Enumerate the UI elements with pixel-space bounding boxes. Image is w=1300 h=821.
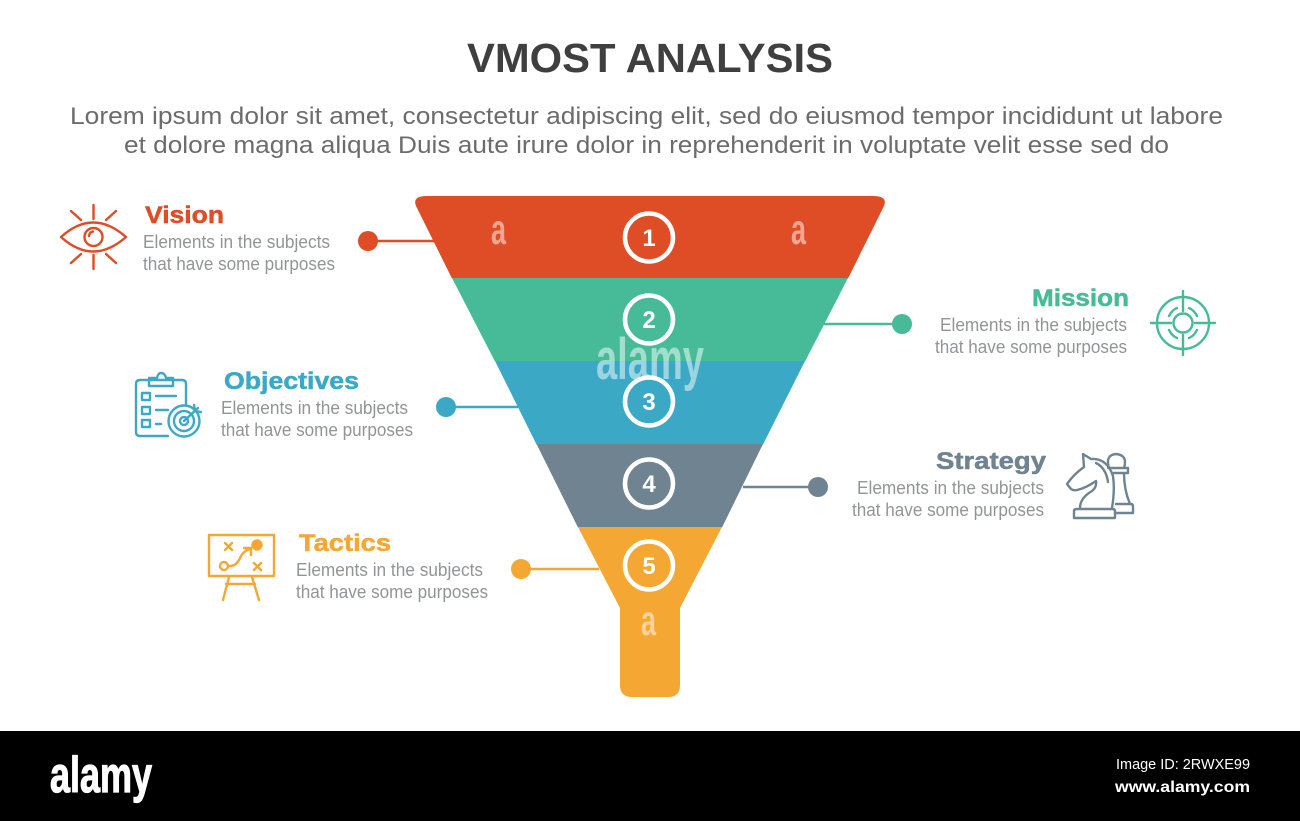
- heading: tactics: Tactics: [299, 530, 391, 557]
- icon: clipboard and dart target: [136, 373, 201, 436]
- funnel segment 1: red: [415, 196, 885, 278]
- description: vision: Elements in the subjects: [143, 232, 330, 252]
- funnel segment 5: orange with spout: [578, 527, 722, 697]
- number badge 2: 2: [642, 307, 656, 334]
- subtitle text: Lorem ipsum dolor sit amet, consectetur adipiscing elit, sed do eiusmod tempor incididunt ut labore: [70, 103, 1223, 130]
- description: tactics: [296, 560, 488, 602]
- panel: vision: [61, 202, 335, 274]
- subtitle text: et dolore magna aliqua Duis aute irure dolor in reprehenderit in voluptate velit esse sed do: [124, 132, 1169, 159]
- funnel segment 2: green: [452, 278, 848, 362]
- description: mission: Elements in the subjects: [940, 315, 1127, 335]
- connector: mission: [824, 314, 912, 334]
- watermark marks on funnel: a: [491, 206, 507, 254]
- title: VMOST ANALYSIS: [467, 35, 833, 81]
- number badge 3: 3: [642, 389, 656, 416]
- connector: strategy: [743, 477, 828, 497]
- number badge 3: [625, 378, 673, 426]
- footer bar: [0, 731, 1300, 821]
- number badge 5: 5: [642, 553, 656, 580]
- description: strategy: that have some purposes: [852, 500, 1044, 520]
- description: mission: that have some purposes: [935, 337, 1127, 357]
- description: mission: [935, 315, 1127, 357]
- icon: tactics board on easel: [209, 535, 274, 600]
- funnel segment 4: grey: [536, 444, 763, 528]
- panel: tactics: [209, 530, 488, 602]
- description: vision: that have some purposes: [143, 254, 335, 274]
- number badge 1: [625, 214, 673, 262]
- watermark marks on funnel: [491, 206, 807, 645]
- panel: strategy: [852, 448, 1133, 520]
- heading: objectives: Objectives: [224, 368, 359, 395]
- description: objectives: that have some purposes: [221, 420, 413, 440]
- description: strategy: [852, 478, 1044, 520]
- number badge 4: [625, 460, 673, 508]
- funnel segment 3: blue: [495, 361, 805, 444]
- funnel chart: [415, 196, 885, 697]
- number badge 4: 4: [642, 471, 656, 498]
- description: objectives: Elements in the subjects: [221, 398, 408, 418]
- description: objectives: [221, 398, 413, 440]
- heading: vision: Vision: [145, 202, 224, 229]
- connector: objectives: [436, 397, 518, 417]
- description: vision: [143, 232, 335, 274]
- footer logo: alamy: [50, 747, 152, 803]
- connector: vision: [358, 231, 434, 251]
- number badge 5: [625, 542, 673, 590]
- watermark marks on funnel: a: [791, 206, 807, 254]
- description: tactics: Elements in the subjects: [296, 560, 483, 580]
- image id: Image ID: 2RWXE99: [1116, 756, 1250, 773]
- connector: tactics: [511, 559, 599, 579]
- number badge 1: 1: [642, 225, 656, 252]
- panel: mission: [935, 285, 1215, 357]
- icon: chess knight and pawn: [1067, 454, 1133, 518]
- heading: strategy: Strategy: [936, 448, 1047, 475]
- number badge 2: [625, 296, 673, 344]
- heading: mission: Mission: [1032, 285, 1129, 312]
- subtitle text: [70, 103, 1223, 159]
- watermark marks on funnel: a: [641, 597, 657, 645]
- watermark marks on funnel: alamy: [596, 327, 704, 392]
- icon: eye: [61, 205, 126, 269]
- description: tactics: that have some purposes: [296, 582, 488, 602]
- icon: target crosshair: [1151, 291, 1215, 355]
- website: www.alamy.com: [1114, 779, 1250, 796]
- description: strategy: Elements in the subjects: [857, 478, 1044, 498]
- panel: objectives: [136, 368, 413, 440]
